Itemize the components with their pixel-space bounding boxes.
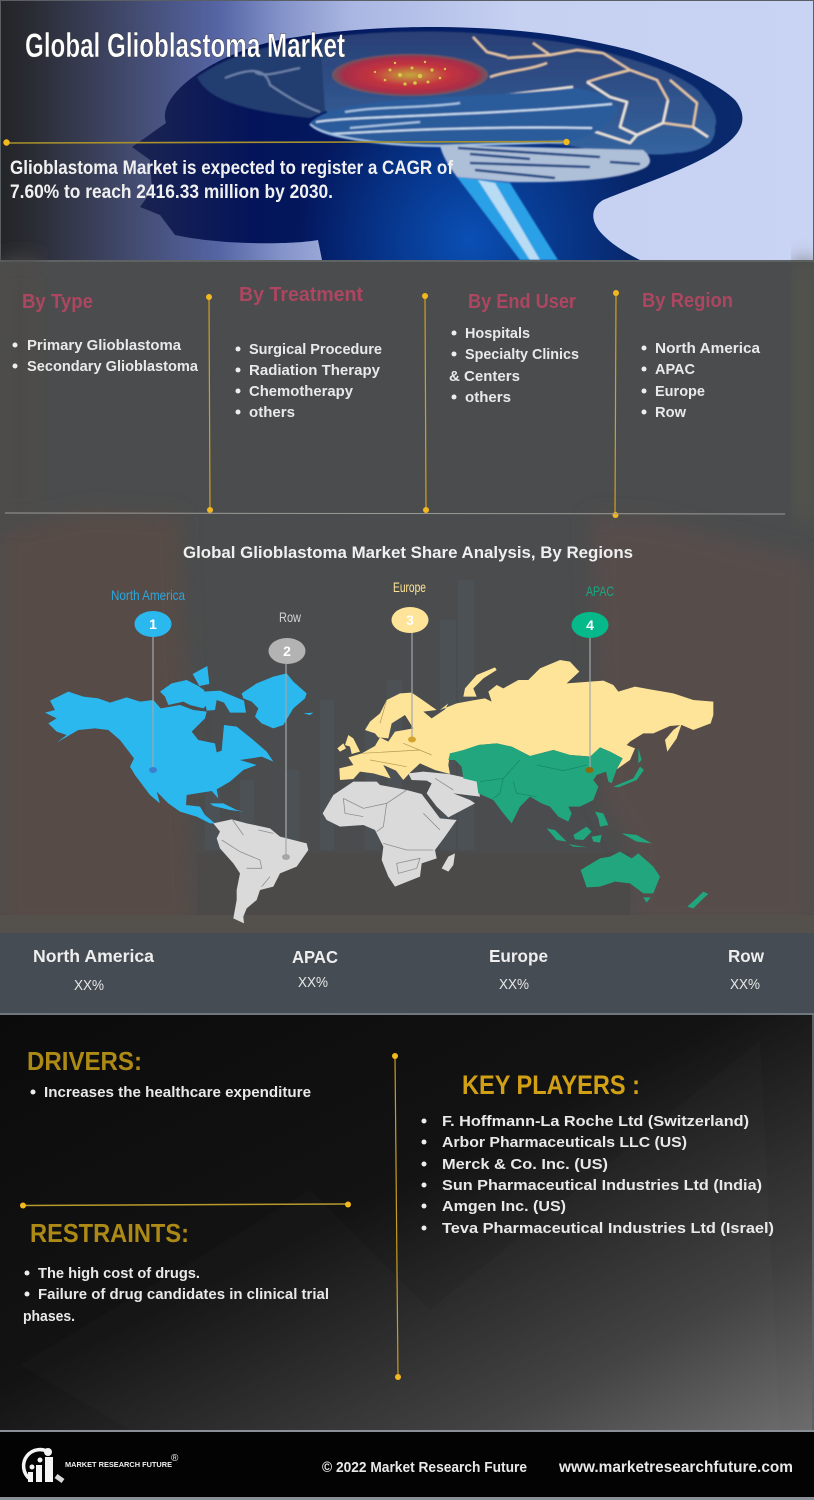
key players block: Teva Pharmaceutical Industries Ltd (Israel) xyxy=(442,1220,774,1237)
marker 2: Row xyxy=(268,609,306,860)
column: By Region: By Region xyxy=(642,290,733,312)
icon: market research future logo xyxy=(24,1448,63,1482)
marker 3: Europe: Europe xyxy=(393,579,426,595)
decorative faint arrow backdrop xyxy=(20,1040,780,1430)
drivers block: DRIVERS: xyxy=(27,1046,142,1076)
column: By Treatment: Chemotherapy xyxy=(249,383,354,400)
marker 4: APAC: 4 xyxy=(586,617,594,633)
column: By Region: Row xyxy=(655,404,686,421)
dividers: gold column separators xyxy=(206,290,619,518)
column: By Region xyxy=(642,290,761,421)
marker 3: Europe xyxy=(392,579,428,742)
column: By End User: others xyxy=(465,389,511,406)
column: By Treatment: Radiation Therapy xyxy=(249,362,381,379)
column: By Region: North America xyxy=(655,340,761,357)
panel: hero banner xyxy=(1,1,813,260)
marker 4: APAC: APAC xyxy=(586,583,614,599)
panel: segmentation and map background xyxy=(0,260,814,933)
key players block: Arbor Pharmaceuticals LLC (US) xyxy=(442,1134,687,1151)
marker 2: Row: 2 xyxy=(283,643,291,659)
website: www.marketresearchfuture.com xyxy=(558,1459,793,1476)
marker 2: Row: Row xyxy=(279,609,302,625)
copyright: © 2022 Market Research Future xyxy=(322,1459,527,1476)
stat: APAC: XX% xyxy=(298,974,328,991)
column: By End User xyxy=(449,291,579,406)
column: By Region: Europe xyxy=(655,383,705,400)
icon: head and brain illustration xyxy=(132,27,742,260)
key players block: Merck & Co. Inc. (US) xyxy=(442,1156,608,1173)
stat: Europe: XX% xyxy=(499,976,529,993)
restraints block: Failure of drug candidates in clinical trial xyxy=(38,1286,329,1303)
brain: cerebellum xyxy=(440,145,650,182)
panel: footer xyxy=(0,1430,814,1500)
brain: temporal lobe xyxy=(310,88,617,146)
panel: region share strip xyxy=(0,933,814,1015)
stat: North America: XX% xyxy=(74,977,104,994)
column: By Type xyxy=(12,291,199,375)
brain: cerebrum xyxy=(320,32,716,155)
stat: Europe: Europe xyxy=(489,946,548,966)
stat: APAC: APAC xyxy=(292,947,338,967)
stat: North America xyxy=(33,946,154,994)
region: Europe and Russia xyxy=(337,660,713,780)
decorative hands and bars photo backdrop xyxy=(0,260,814,933)
decorative chart bars backdrop xyxy=(205,580,474,850)
region: Africa and Middle East xyxy=(323,772,480,887)
stat: APAC xyxy=(292,947,338,991)
column: By Treatment: Surgical Procedure xyxy=(249,341,382,358)
restraints block: RESTRAINTS: xyxy=(30,1218,189,1248)
key players block: KEY PLAYERS : xyxy=(462,1070,640,1100)
column: By Type: By Type xyxy=(22,291,93,313)
title: Global Glioblastoma Market xyxy=(25,27,345,65)
restraints block: The high cost of drugs. xyxy=(38,1265,200,1282)
brain: stem xyxy=(457,177,558,260)
marker 4: APAC xyxy=(572,583,614,773)
stat: Row xyxy=(728,946,764,993)
column: By Treatment: By Treatment xyxy=(239,284,363,306)
brain: frontal lobe xyxy=(197,38,340,118)
stat: North America: North America xyxy=(33,946,154,966)
tumor speckles xyxy=(374,61,446,86)
column: By Treatment: others xyxy=(249,404,295,421)
restraints block xyxy=(23,1218,329,1325)
text: market summary: Glioblastoma Market is expected to register a CAGR of xyxy=(10,158,454,179)
drivers block xyxy=(27,1046,311,1101)
restraints block: phases. xyxy=(23,1308,75,1325)
marker 1: North America: 1 xyxy=(149,616,157,632)
drivers block: Increases the healthcare expenditure xyxy=(44,1084,311,1101)
region: South America xyxy=(213,819,308,923)
brain: veins xyxy=(473,37,708,143)
column: By End User: Hospitals xyxy=(465,325,530,342)
stat: Row: Row xyxy=(728,946,764,966)
key players block: Sun Pharmaceutical Industries Ltd (India) xyxy=(442,1177,762,1194)
column: By End User: By End User xyxy=(468,291,576,313)
divider: horizontal gold line xyxy=(20,1202,351,1208)
stat: Row: XX% xyxy=(730,976,760,993)
stat: Europe xyxy=(489,946,548,993)
key players block: Amgen Inc. (US) xyxy=(442,1198,566,1215)
icon: tumor xyxy=(332,54,488,96)
column: By Type: Primary Glioblastoma xyxy=(27,337,182,354)
text: market summary: 7.60% to reach 2416.33 million by 2030. xyxy=(10,182,333,203)
heading: market share analysis: Global Glioblastoma Market Share Analysis, By Regions xyxy=(183,543,633,562)
divider: gold line with dots xyxy=(3,139,570,146)
column: By End User: & Centers xyxy=(449,368,520,385)
logo wordmark: MARKET RESEARCH FUTURE xyxy=(65,1460,172,1469)
registered mark: ® xyxy=(171,1453,179,1464)
column: By Region: APAC xyxy=(655,361,695,378)
region: North America xyxy=(45,666,313,823)
column: By Treatment xyxy=(236,284,382,421)
marker 1: North America xyxy=(111,587,185,773)
key players block: F. Hoffmann-La Roche Ltd (Switzerland) xyxy=(442,1113,749,1130)
divider: vertical gold line xyxy=(392,1053,401,1380)
marker 1: North America: North America xyxy=(111,587,185,603)
chart: world map by region xyxy=(45,660,713,923)
panel: drivers, restraints and key players xyxy=(0,1015,812,1430)
column: By Type: Secondary Glioblastoma xyxy=(27,358,199,375)
region: Asia Pacific xyxy=(448,743,708,908)
column: By End User: Specialty Clinics xyxy=(465,346,579,363)
map markers xyxy=(111,579,614,860)
text: market summary xyxy=(10,158,454,203)
marker 3: Europe: 3 xyxy=(406,612,414,628)
key players block xyxy=(422,1070,774,1237)
